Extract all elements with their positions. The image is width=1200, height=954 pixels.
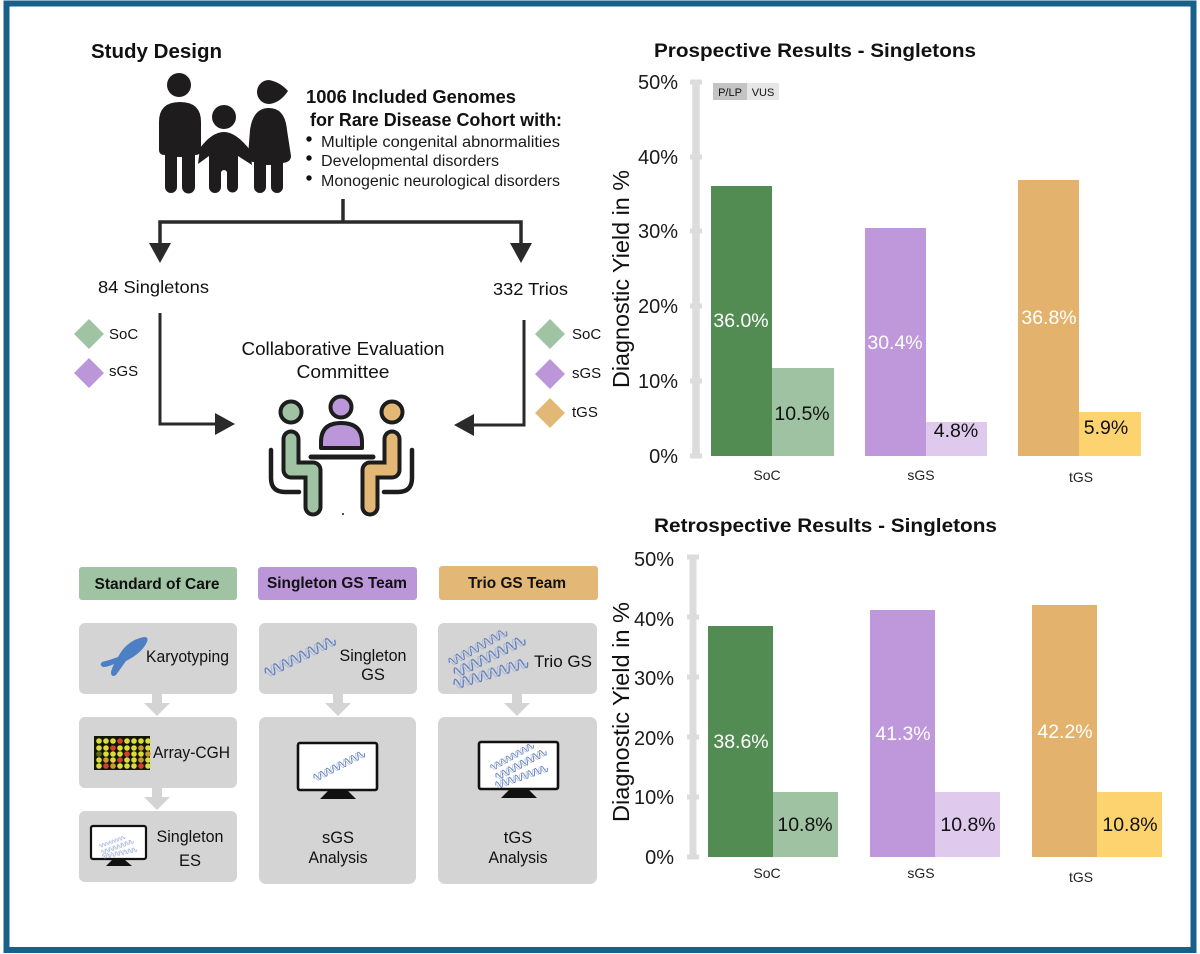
- y axis: 40%: [638, 147, 678, 169]
- y axis: 20%: [638, 296, 678, 318]
- y axis: 10%: [638, 371, 678, 393]
- y axis: 0%: [645, 847, 674, 869]
- arrow: step: [504, 694, 530, 716]
- bars: soc: SoC: [753, 865, 781, 881]
- step: karyotyping: [79, 623, 237, 694]
- step: tgs analysis: [438, 717, 597, 884]
- y axis: 0%: [649, 446, 678, 468]
- text: cohort description: 1006 Included Genomes: [306, 87, 516, 107]
- bars: sgs: 30.4%: [867, 332, 923, 354]
- step: karyotyping: Karyotyping: [146, 648, 229, 666]
- icon: dna trio: [448, 628, 529, 689]
- header: standard of care: [79, 567, 237, 600]
- arrow: singletons to committee: [160, 313, 235, 435]
- bars: tgs: [1032, 605, 1162, 885]
- step: array-cgh: Array-CGH: [153, 744, 230, 762]
- icon: microarray: [94, 736, 151, 770]
- arrow: step: [144, 788, 170, 810]
- bars: sgs: [865, 228, 987, 483]
- step: tgs analysis: tGS: [504, 829, 532, 847]
- y axis: 10%: [634, 787, 674, 809]
- icon: monitor: [479, 742, 558, 798]
- bars: sgs: 4.8%: [934, 420, 978, 442]
- bars: tgs: 10.8%: [1102, 814, 1158, 836]
- label: trios: 332 Trios: [493, 279, 568, 299]
- text: cohort description: Monogenic neurological disorders: [321, 173, 560, 190]
- legend: p/lp vs vus: [713, 83, 779, 100]
- bars: sgs: 41.3%: [875, 723, 931, 745]
- step: trio gs: [438, 623, 597, 694]
- step: singleton es: Singleton: [156, 828, 224, 846]
- chart title: Prospective Results - Singletons: [654, 41, 976, 62]
- chart: retrospective results: [608, 516, 1162, 885]
- text: cohort description: Developmental disorders: [321, 153, 499, 170]
- step: singleton gs: GS: [361, 666, 385, 684]
- header: trio gs team: Trio GS Team: [468, 575, 566, 592]
- step: singleton gs: [259, 623, 417, 694]
- bars: tgs: 42.2%: [1037, 721, 1093, 743]
- heading: committee: Collaborative Evaluation: [242, 339, 444, 359]
- chart: prospective results: [608, 41, 1141, 485]
- step: sgs analysis: Analysis: [308, 849, 368, 867]
- step: sgs analysis: [259, 717, 416, 884]
- header: singleton gs team: [258, 567, 417, 600]
- legend: singleton arms: sGS: [109, 363, 138, 380]
- y axis: 20%: [634, 728, 674, 750]
- bars: soc: [711, 186, 834, 483]
- icon: monitor: [298, 743, 377, 799]
- column: singleton gs team: [258, 567, 417, 884]
- bars: sgs: sGS: [907, 865, 935, 881]
- text: cohort description: for Rare Disease Cohort with:: [310, 110, 562, 130]
- y axis: 50%: [634, 549, 674, 571]
- y axis: 40%: [634, 609, 674, 631]
- icon: family: [159, 73, 291, 194]
- bars: soc: 10.5%: [774, 403, 830, 425]
- legend: trio arms: SoC: [572, 326, 601, 343]
- step: array-cgh: [79, 717, 237, 788]
- legend: p/lp vs vus: P/LP: [718, 87, 742, 99]
- chart title: Retrospective Results - Singletons: [654, 516, 997, 537]
- legend: trio arms: tGS: [572, 404, 598, 421]
- bars: tgs: 36.8%: [1021, 307, 1077, 329]
- column: trio gs team: [438, 566, 598, 884]
- column: standard of care: [79, 567, 237, 882]
- bars: sgs: [870, 610, 1000, 881]
- bars: sgs: sGS: [907, 467, 935, 483]
- arrow: step: [144, 694, 170, 716]
- header: singleton gs team: Singleton GS Team: [267, 575, 407, 592]
- step: singleton es: ES: [179, 852, 201, 870]
- bars: tgs: tGS: [1069, 869, 1093, 885]
- y axis: [608, 72, 702, 468]
- header: trio gs team: [439, 566, 598, 600]
- legend: p/lp vs vus: VUS: [752, 87, 774, 99]
- text: cohort description: [306, 87, 562, 190]
- label: singletons: 84 Singletons: [98, 277, 209, 297]
- text: cohort description: Multiple congenital abnormalities: [321, 134, 560, 151]
- heading: committee: [242, 339, 444, 382]
- y axis: [608, 549, 699, 869]
- icon: chromosome: [101, 637, 148, 676]
- step: tgs analysis: Analysis: [488, 849, 548, 867]
- y axis: Diagnostic Yield in %: [608, 170, 634, 388]
- bars: soc: [708, 626, 838, 881]
- y axis: 50%: [638, 72, 678, 94]
- icon: monitor: [91, 826, 146, 866]
- y axis: 30%: [638, 221, 678, 243]
- icon: committee: [271, 396, 412, 515]
- bars: soc: 10.8%: [777, 814, 833, 836]
- bars: tgs: tGS: [1069, 469, 1093, 485]
- step: singleton es: [79, 811, 237, 882]
- icon: dna: [264, 635, 337, 678]
- bars: soc: 38.6%: [713, 731, 769, 753]
- bars: soc: SoC: [753, 467, 781, 483]
- legend: singleton arms: [74, 319, 138, 388]
- step: singleton gs: Singleton: [340, 647, 406, 665]
- arrow: split into cohorts: [149, 199, 532, 263]
- y axis: Diagnostic Yield in %: [608, 602, 634, 822]
- step: sgs analysis: sGS: [322, 829, 354, 847]
- header: standard of care: Standard of Care: [94, 576, 220, 593]
- bars: tgs: [1018, 180, 1141, 485]
- step: trio gs: Trio GS: [534, 653, 592, 671]
- heading: committee: Committee: [296, 362, 390, 382]
- legend: singleton arms: SoC: [109, 326, 138, 343]
- arrow: trios to committee: [454, 320, 524, 436]
- legend: trio arms: [535, 319, 601, 428]
- legend: trio arms: sGS: [572, 365, 601, 382]
- bars: tgs: 5.9%: [1084, 417, 1128, 439]
- bars: soc: 36.0%: [713, 310, 769, 332]
- bars: sgs: 10.8%: [940, 814, 996, 836]
- y axis: 30%: [634, 668, 674, 690]
- heading: study design: Study Design: [91, 41, 222, 63]
- arrow: step: [325, 694, 351, 716]
